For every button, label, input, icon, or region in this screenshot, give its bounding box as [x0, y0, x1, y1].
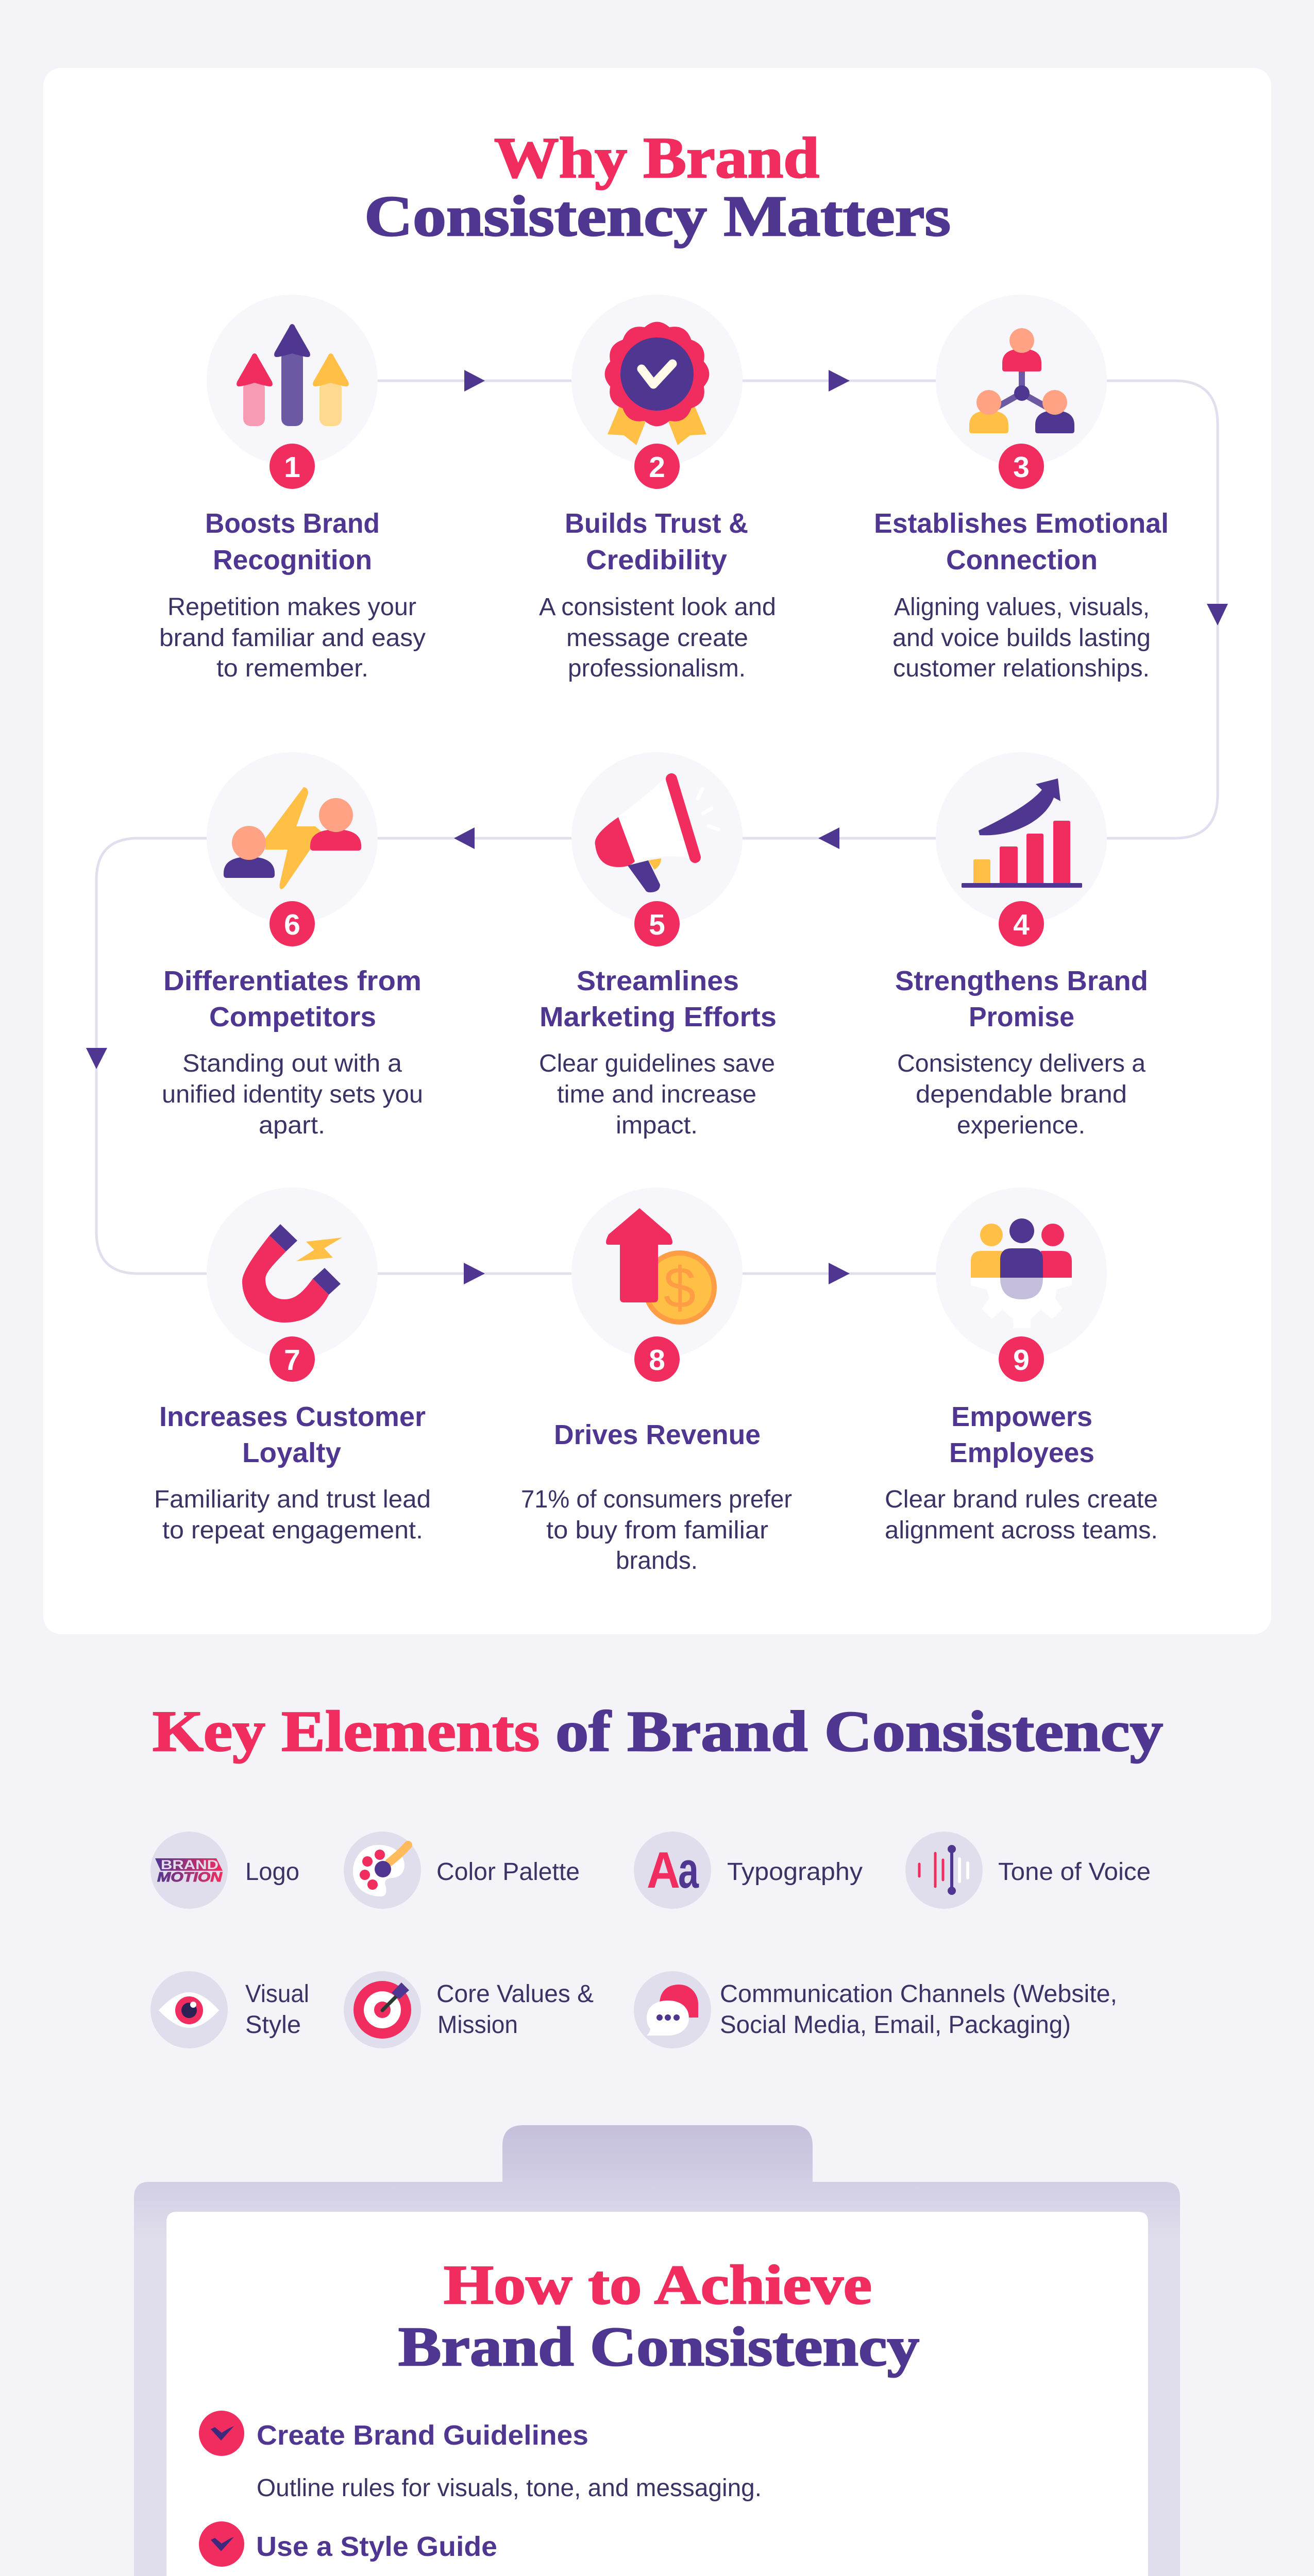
heading 5: Streamlines — [577, 965, 739, 996]
icon: small brand logo: BRAND — [161, 1858, 218, 1872]
icon: sound wave — [919, 1845, 968, 1895]
heading 4 — [895, 965, 1148, 1032]
panel: how to achieve brand consistency — [134, 2125, 1180, 2576]
connector line — [96, 381, 1218, 1274]
description 5: Clear guidelines save — [539, 1050, 775, 1077]
number badge 1 — [269, 444, 315, 489]
number badge 3: 3 — [1013, 451, 1030, 484]
description 1: Repetition makes your — [167, 594, 416, 621]
heading 3: Establishes Emotional — [874, 508, 1169, 539]
clipboard sheet — [166, 2212, 1148, 2576]
heading: key elements: Key Elements — [153, 1700, 540, 1764]
icon: rising arrows — [237, 324, 349, 426]
icon: magnet — [242, 1224, 342, 1323]
description 8: brands. — [616, 1547, 698, 1574]
icon: up arrow and coin: $ — [664, 1256, 696, 1320]
element: core values and mission — [344, 1971, 594, 2048]
element: tone of voice — [905, 1832, 1151, 1909]
element: communication channels: Communication Channels (Website, — [720, 1980, 1117, 2008]
element: typography: Typography — [727, 1858, 863, 1886]
description 3: customer relationships. — [893, 655, 1150, 682]
step 1: boosts brand recognition — [159, 295, 426, 682]
number badge 1: 1 — [284, 451, 300, 484]
number badge 8 — [634, 1336, 680, 1382]
icon: small brand logo: MOTION — [157, 1869, 223, 1885]
heading 2 — [565, 508, 748, 575]
item: create brand guidelines: Outline rules for visuals, tone, and messaging. — [257, 2475, 762, 2502]
heading 4: Promise — [969, 1002, 1074, 1032]
step 3: emotional connection — [874, 295, 1169, 682]
heading: key elements — [153, 1700, 1163, 1764]
number badge 9 — [999, 1336, 1044, 1382]
description 2: professionalism. — [568, 655, 746, 682]
description 9: alignment across teams. — [885, 1517, 1158, 1544]
element: visual style — [150, 1971, 309, 2048]
description 7: Familiarity and trust lead — [154, 1486, 431, 1513]
number badge 4: 4 — [1013, 908, 1030, 941]
description 6 — [162, 1050, 423, 1139]
number badge 3 — [999, 444, 1044, 489]
section: key elements of brand consistency — [150, 1700, 1163, 2048]
heading 2: Builds Trust & — [565, 508, 748, 539]
icon: up arrow and coin — [606, 1208, 717, 1325]
element: communication channels: Social Media, Email, Packaging) — [720, 2011, 1071, 2039]
icon: connected people — [969, 328, 1074, 433]
icon: megaphone — [595, 778, 718, 892]
description 8: to buy from familiar — [546, 1517, 768, 1544]
heading: key elements: of Brand Consistency — [555, 1700, 1163, 1764]
description 9 — [885, 1486, 1158, 1544]
description 8: 71% of consumers prefer — [521, 1486, 792, 1513]
heading: how to achieve: How to Achieve — [444, 2255, 872, 2316]
description 2: message create — [566, 624, 748, 652]
description 1: to remember. — [216, 655, 368, 682]
panel: why brand consistency matters — [43, 68, 1271, 1634]
icon: palette and brush — [353, 1845, 408, 1896]
heading 5 — [540, 965, 777, 1032]
description 4: dependable brand — [916, 1081, 1127, 1108]
element: core values and mission: Core Values & — [436, 1980, 594, 2008]
arrows along connector — [86, 370, 1228, 1284]
step 6: differentiates from competitors — [162, 752, 423, 1139]
icon: Aa: a — [678, 1841, 699, 1899]
description 2: A consistent look and — [539, 594, 776, 621]
number badge 4 — [999, 901, 1044, 946]
description 9: Clear brand rules create — [885, 1486, 1158, 1513]
heading 3 — [874, 508, 1169, 575]
description 6: unified identity sets you — [162, 1081, 423, 1108]
element: communication channels — [634, 1971, 1117, 2048]
number badge 2: 2 — [649, 451, 665, 484]
heading 1: Boosts Brand — [205, 508, 380, 539]
heading 5: Marketing Efforts — [540, 1002, 777, 1032]
title: Consistency Matters — [364, 184, 951, 248]
number badge 2 — [634, 444, 680, 489]
icon: Aa: A — [647, 1841, 680, 1899]
number badge 8: 8 — [649, 1344, 665, 1377]
element: visual style: Style — [245, 2011, 301, 2039]
step 7: customer loyalty — [154, 1188, 431, 1544]
item: use a style guide: Use a Style Guide — [256, 2531, 497, 2562]
heading 6: Differentiates from — [163, 965, 422, 996]
title: Why Brand — [494, 126, 819, 190]
description 5: impact. — [616, 1112, 698, 1139]
step 5: streamlines marketing — [539, 752, 777, 1139]
element: typography — [634, 1832, 863, 1909]
icon: chat bubbles — [647, 1985, 698, 2036]
number badge 5 — [634, 901, 680, 946]
description 8 — [521, 1486, 792, 1574]
icon: target with dart — [353, 1981, 411, 2039]
heading 1: Recognition — [213, 545, 372, 575]
number badge 6 — [269, 901, 315, 946]
heading 7: Loyalty — [242, 1437, 341, 1468]
number badge 6: 6 — [284, 908, 300, 941]
description 6: Standing out with a — [182, 1050, 402, 1077]
heading 1 — [205, 508, 380, 575]
element: core values and mission: Mission — [437, 2011, 518, 2039]
heading 2: Credibility — [586, 545, 727, 575]
heading 9 — [949, 1401, 1094, 1468]
description 4: experience. — [957, 1112, 1085, 1139]
heading 6: Competitors — [209, 1002, 376, 1032]
description 4 — [897, 1050, 1145, 1139]
element: tone of voice: Tone of Voice — [998, 1858, 1151, 1886]
title — [364, 126, 951, 248]
description 3 — [892, 594, 1151, 682]
item: use a style guide — [199, 2521, 901, 2576]
heading 3: Connection — [946, 545, 1098, 575]
heading 7 — [159, 1401, 426, 1468]
heading 9: Employees — [949, 1437, 1094, 1468]
item: create brand guidelines: Create Brand Guidelines — [257, 2420, 588, 2451]
icon: growth chart — [962, 778, 1082, 888]
heading 4: Strengthens Brand — [895, 965, 1148, 996]
description 6: apart. — [259, 1112, 325, 1139]
heading: how to achieve — [398, 2255, 919, 2378]
description 5 — [539, 1050, 775, 1139]
description 7 — [154, 1486, 431, 1544]
description 1: brand familiar and easy — [159, 624, 426, 652]
number badge 5: 5 — [649, 908, 665, 941]
element: logo — [150, 1832, 299, 1909]
icon: team with rosette — [971, 1218, 1072, 1328]
heading 7: Increases Customer — [159, 1401, 426, 1432]
heading 6 — [163, 965, 422, 1032]
number badge 7: 7 — [284, 1344, 300, 1377]
heading: how to achieve: Brand Consistency — [398, 2316, 919, 2378]
step 2: builds trust and credibility — [539, 295, 776, 682]
heading 9: Empowers — [951, 1401, 1092, 1432]
description 4: Consistency delivers a — [897, 1050, 1145, 1077]
clipboard frame — [134, 2125, 1180, 2576]
element: visual style: Visual — [245, 1980, 309, 2008]
step 9: empowers employees — [885, 1188, 1158, 1544]
description 2 — [539, 594, 776, 682]
description 3: and voice builds lasting — [892, 624, 1151, 652]
icon: small brand logo — [155, 1858, 223, 1885]
heading 8: Drives Revenue — [554, 1419, 761, 1450]
step 8: drives revenue — [521, 1188, 792, 1574]
step 4: strengthens brand promise — [895, 752, 1148, 1139]
description 3: Aligning values, visuals, — [894, 594, 1150, 621]
description 1 — [159, 594, 426, 682]
item: create brand guidelines — [199, 2411, 762, 2502]
icon: people with lightning bolt — [224, 787, 361, 889]
element: color palette: Color Palette — [436, 1858, 580, 1886]
number badge 9: 9 — [1013, 1344, 1030, 1377]
element: logo: Logo — [245, 1858, 299, 1886]
icon: rosette with check — [605, 322, 709, 445]
icon: eye — [159, 1992, 219, 2028]
element: color palette — [344, 1832, 580, 1909]
number badge 7 — [269, 1336, 315, 1382]
description 5: time and increase — [557, 1081, 756, 1108]
description 7: to repeat engagement. — [162, 1517, 423, 1544]
